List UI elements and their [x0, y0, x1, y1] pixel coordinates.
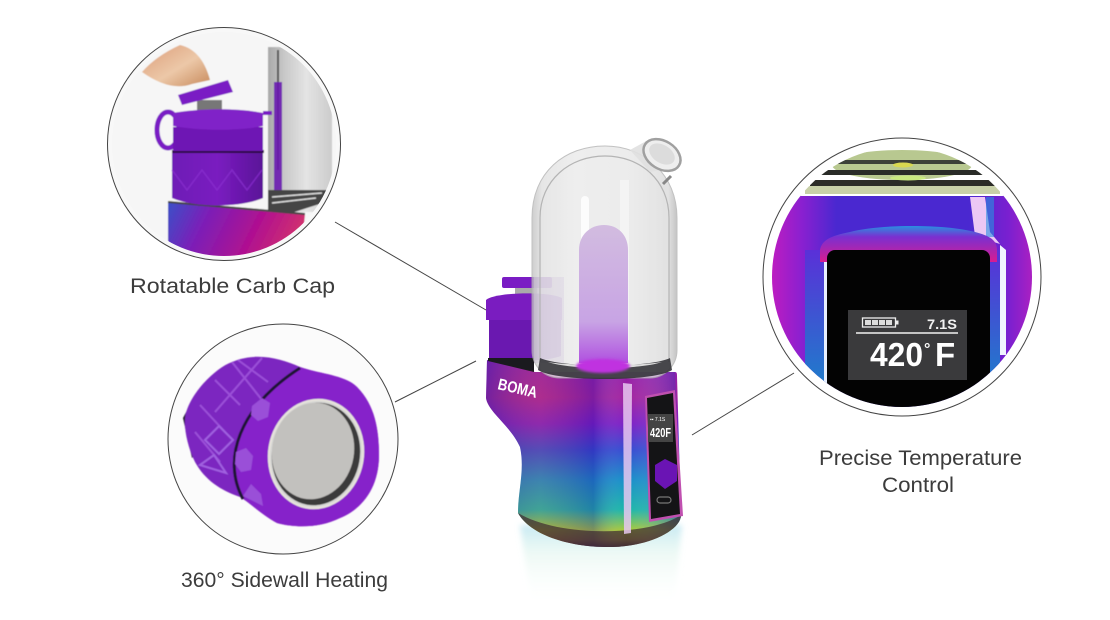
usb-c port [657, 497, 671, 503]
device screen readout [648, 414, 673, 442]
battery icon [862, 318, 898, 327]
panel: sidewall heating detail circle [168, 324, 398, 554]
glass dome [532, 146, 677, 379]
panel: carb cap detail circle [108, 28, 340, 270]
caption: precise temperature control: Precise Temperature [819, 447, 1022, 470]
caption: precise temperature control: Control [882, 474, 954, 497]
caption: rotatable carb cap: Rotatable Carb Cap [130, 275, 335, 298]
caption: 360 sidewall heating: 360° Sidewall Heating [181, 569, 388, 592]
rainbow base body [486, 360, 683, 547]
glow at core base [576, 359, 630, 373]
leader line: carb cap [335, 222, 486, 310]
timer reading: 7.1S [927, 316, 957, 332]
product reflection [520, 525, 682, 610]
logo: BOMA [496, 376, 539, 402]
carb cap behind glass [486, 277, 564, 363]
hexagon button [655, 459, 677, 489]
screen readout panel [848, 310, 967, 380]
glass mouthpiece [630, 133, 686, 184]
glowing heater core [579, 225, 628, 363]
control panel [645, 390, 683, 522]
leader line: temperature control [692, 373, 794, 435]
leader line: sidewall heating [395, 361, 476, 402]
temperature reading: ° [924, 341, 930, 358]
device screen readout: ▪▪ 7.1S [650, 417, 666, 423]
temperature reading: 420 [870, 336, 923, 373]
temperature reading: F [935, 336, 955, 373]
main product: heater device [486, 133, 686, 610]
device screen readout: 420F [650, 425, 671, 440]
base plate [488, 358, 534, 372]
metal highlight strip [623, 383, 632, 534]
caption: precise temperature control [819, 447, 1022, 497]
panel: temperature control detail circle [763, 138, 1041, 425]
